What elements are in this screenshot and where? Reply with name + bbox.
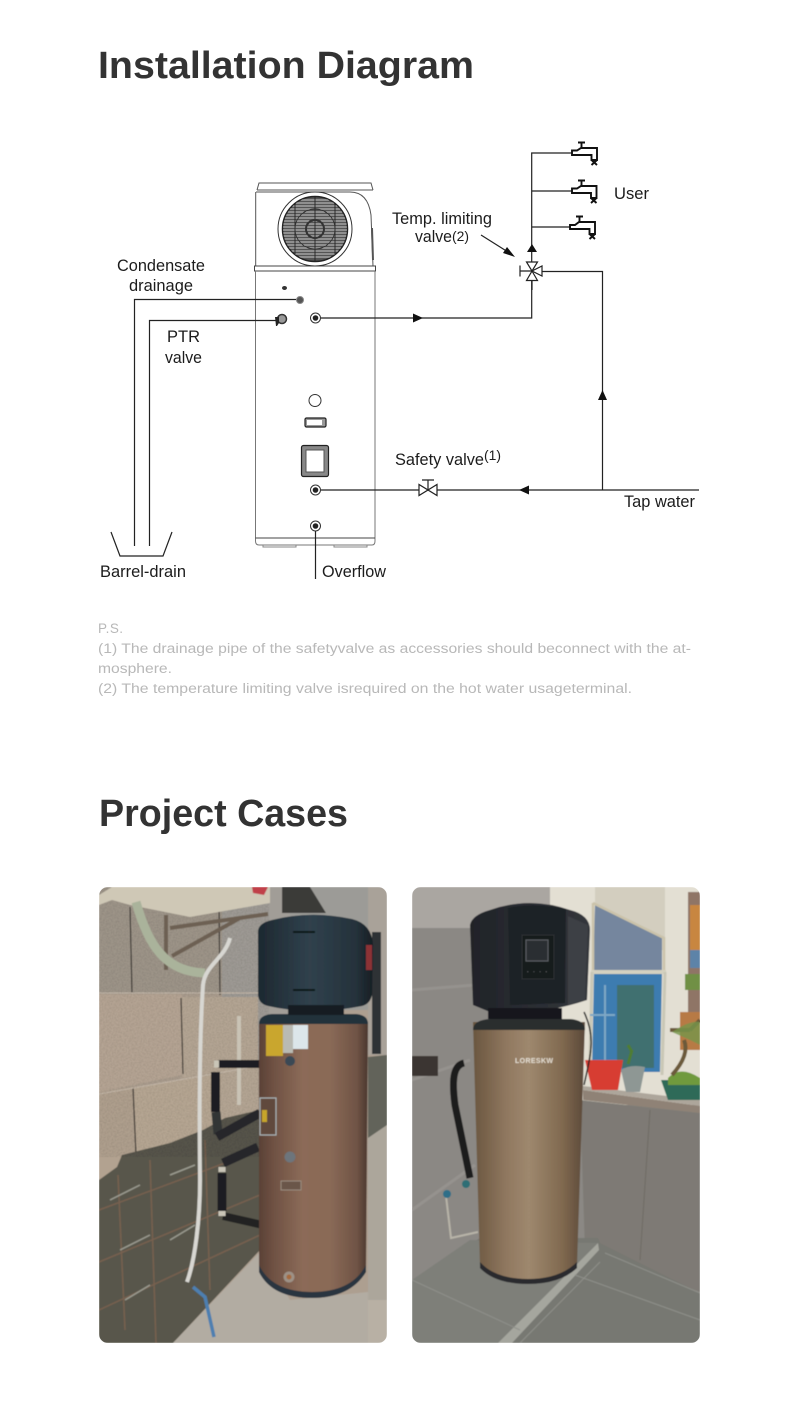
brown tank: [259, 1022, 368, 1298]
labels: User: [614, 185, 650, 203]
photo: outdoor installation case: [99, 887, 387, 1343]
labels: (1): [484, 448, 501, 463]
labels: Overflow: [322, 563, 386, 581]
heat pump water heater unit: [254, 183, 376, 547]
lower wall tile: [580, 1100, 700, 1292]
notes: P.S. text block: [98, 621, 691, 696]
title: Installation Diagram: Installation Diagram: [98, 45, 474, 87]
grey marble wall: [412, 927, 700, 1293]
windows: [593, 905, 662, 970]
arrow: temp limiting valve pointer: [481, 235, 515, 257]
drain pipes and bucket: [111, 300, 296, 556]
labels: valve: [165, 349, 202, 367]
black heat pump top: [470, 903, 590, 1013]
brand text: LORESKW: [515, 1058, 553, 1065]
blue heat pump top: [258, 915, 373, 1011]
sill: [583, 1090, 700, 1113]
ground: [173, 1254, 368, 1343]
fan: [278, 192, 352, 266]
labels: Temp. limiting: [392, 210, 492, 228]
notes: P.S. text block: P.S.: [98, 621, 123, 636]
dark brick wall: [99, 1110, 260, 1343]
white hose: [187, 938, 230, 1282]
right wall and window: [368, 887, 387, 1055]
labels: Condensate: [117, 257, 205, 275]
labels: (2): [452, 229, 469, 244]
upper stone wall: [100, 993, 386, 1340]
building outside: [688, 892, 700, 1013]
labels: drainage: [129, 277, 193, 295]
labels: valve: [415, 228, 452, 246]
cream wall: [550, 887, 700, 1105]
labels: [100, 185, 695, 581]
icon: temperature limiting valve: [520, 262, 542, 290]
connected pipes: [237, 1016, 241, 1105]
display panel: [522, 935, 554, 979]
photo: indoor balcony installation case: [412, 887, 700, 1343]
labels and fittings on tank: [266, 1025, 283, 1056]
floor: [478, 1238, 700, 1343]
labels: PTR: [167, 328, 200, 346]
red bucket and plants: [585, 1060, 623, 1090]
brown tank: [473, 1022, 585, 1283]
socket and hoses: [412, 1056, 438, 1076]
AC unit and bracket: [99, 887, 270, 917]
notes: P.S. text block: (2) The temperature limiting valve isrequired on the hot water usageterminal.: [98, 681, 632, 696]
stone grain: [99, 887, 269, 1157]
photo: indoor balcony installation case: ....: [527, 968, 547, 974]
icon: safety valve: [419, 480, 437, 496]
title: Project Cases: Project Cases: [99, 793, 348, 835]
overflow pipe: [314, 531, 316, 579]
hot water pipe with arrow: [321, 153, 572, 322]
cold water pipe with arrows: [321, 272, 699, 494]
notes: P.S. text block: (1) The drainage pipe of the safetyvalve as accessories should beconnect with the at-: [98, 641, 691, 656]
labels: Barrel-drain: [100, 563, 186, 581]
labels: Safety valve: [395, 451, 484, 469]
ports: [275, 286, 328, 531]
icon: faucets: [570, 142, 597, 239]
installation diagram: [100, 142, 699, 581]
notes: P.S. text block: mosphere.: [98, 661, 172, 676]
labels: Tap water: [624, 493, 695, 511]
